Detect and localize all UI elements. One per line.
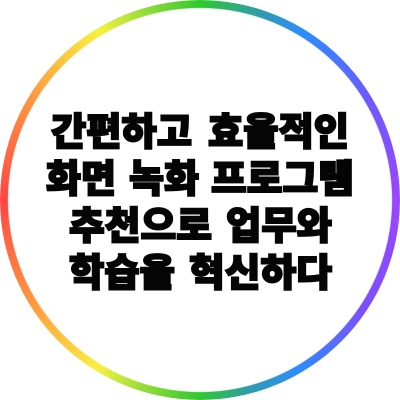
title line 1: 간편하고	[51, 112, 192, 154]
title line 3	[69, 206, 332, 248]
title line 2	[46, 159, 354, 201]
title line 2: 녹화	[129, 159, 199, 201]
title line 4: 학습을	[69, 253, 175, 295]
title line 3: 추천으로	[69, 206, 212, 248]
title line 3: 업무와	[226, 206, 332, 248]
title line 1	[51, 112, 349, 154]
title line 2: 화면	[46, 159, 116, 201]
title line 4: 혁신하다	[189, 253, 332, 295]
title line 2: 프로그램	[211, 159, 354, 201]
title line 4	[69, 253, 332, 295]
title line 1: 효율적인	[208, 112, 349, 154]
